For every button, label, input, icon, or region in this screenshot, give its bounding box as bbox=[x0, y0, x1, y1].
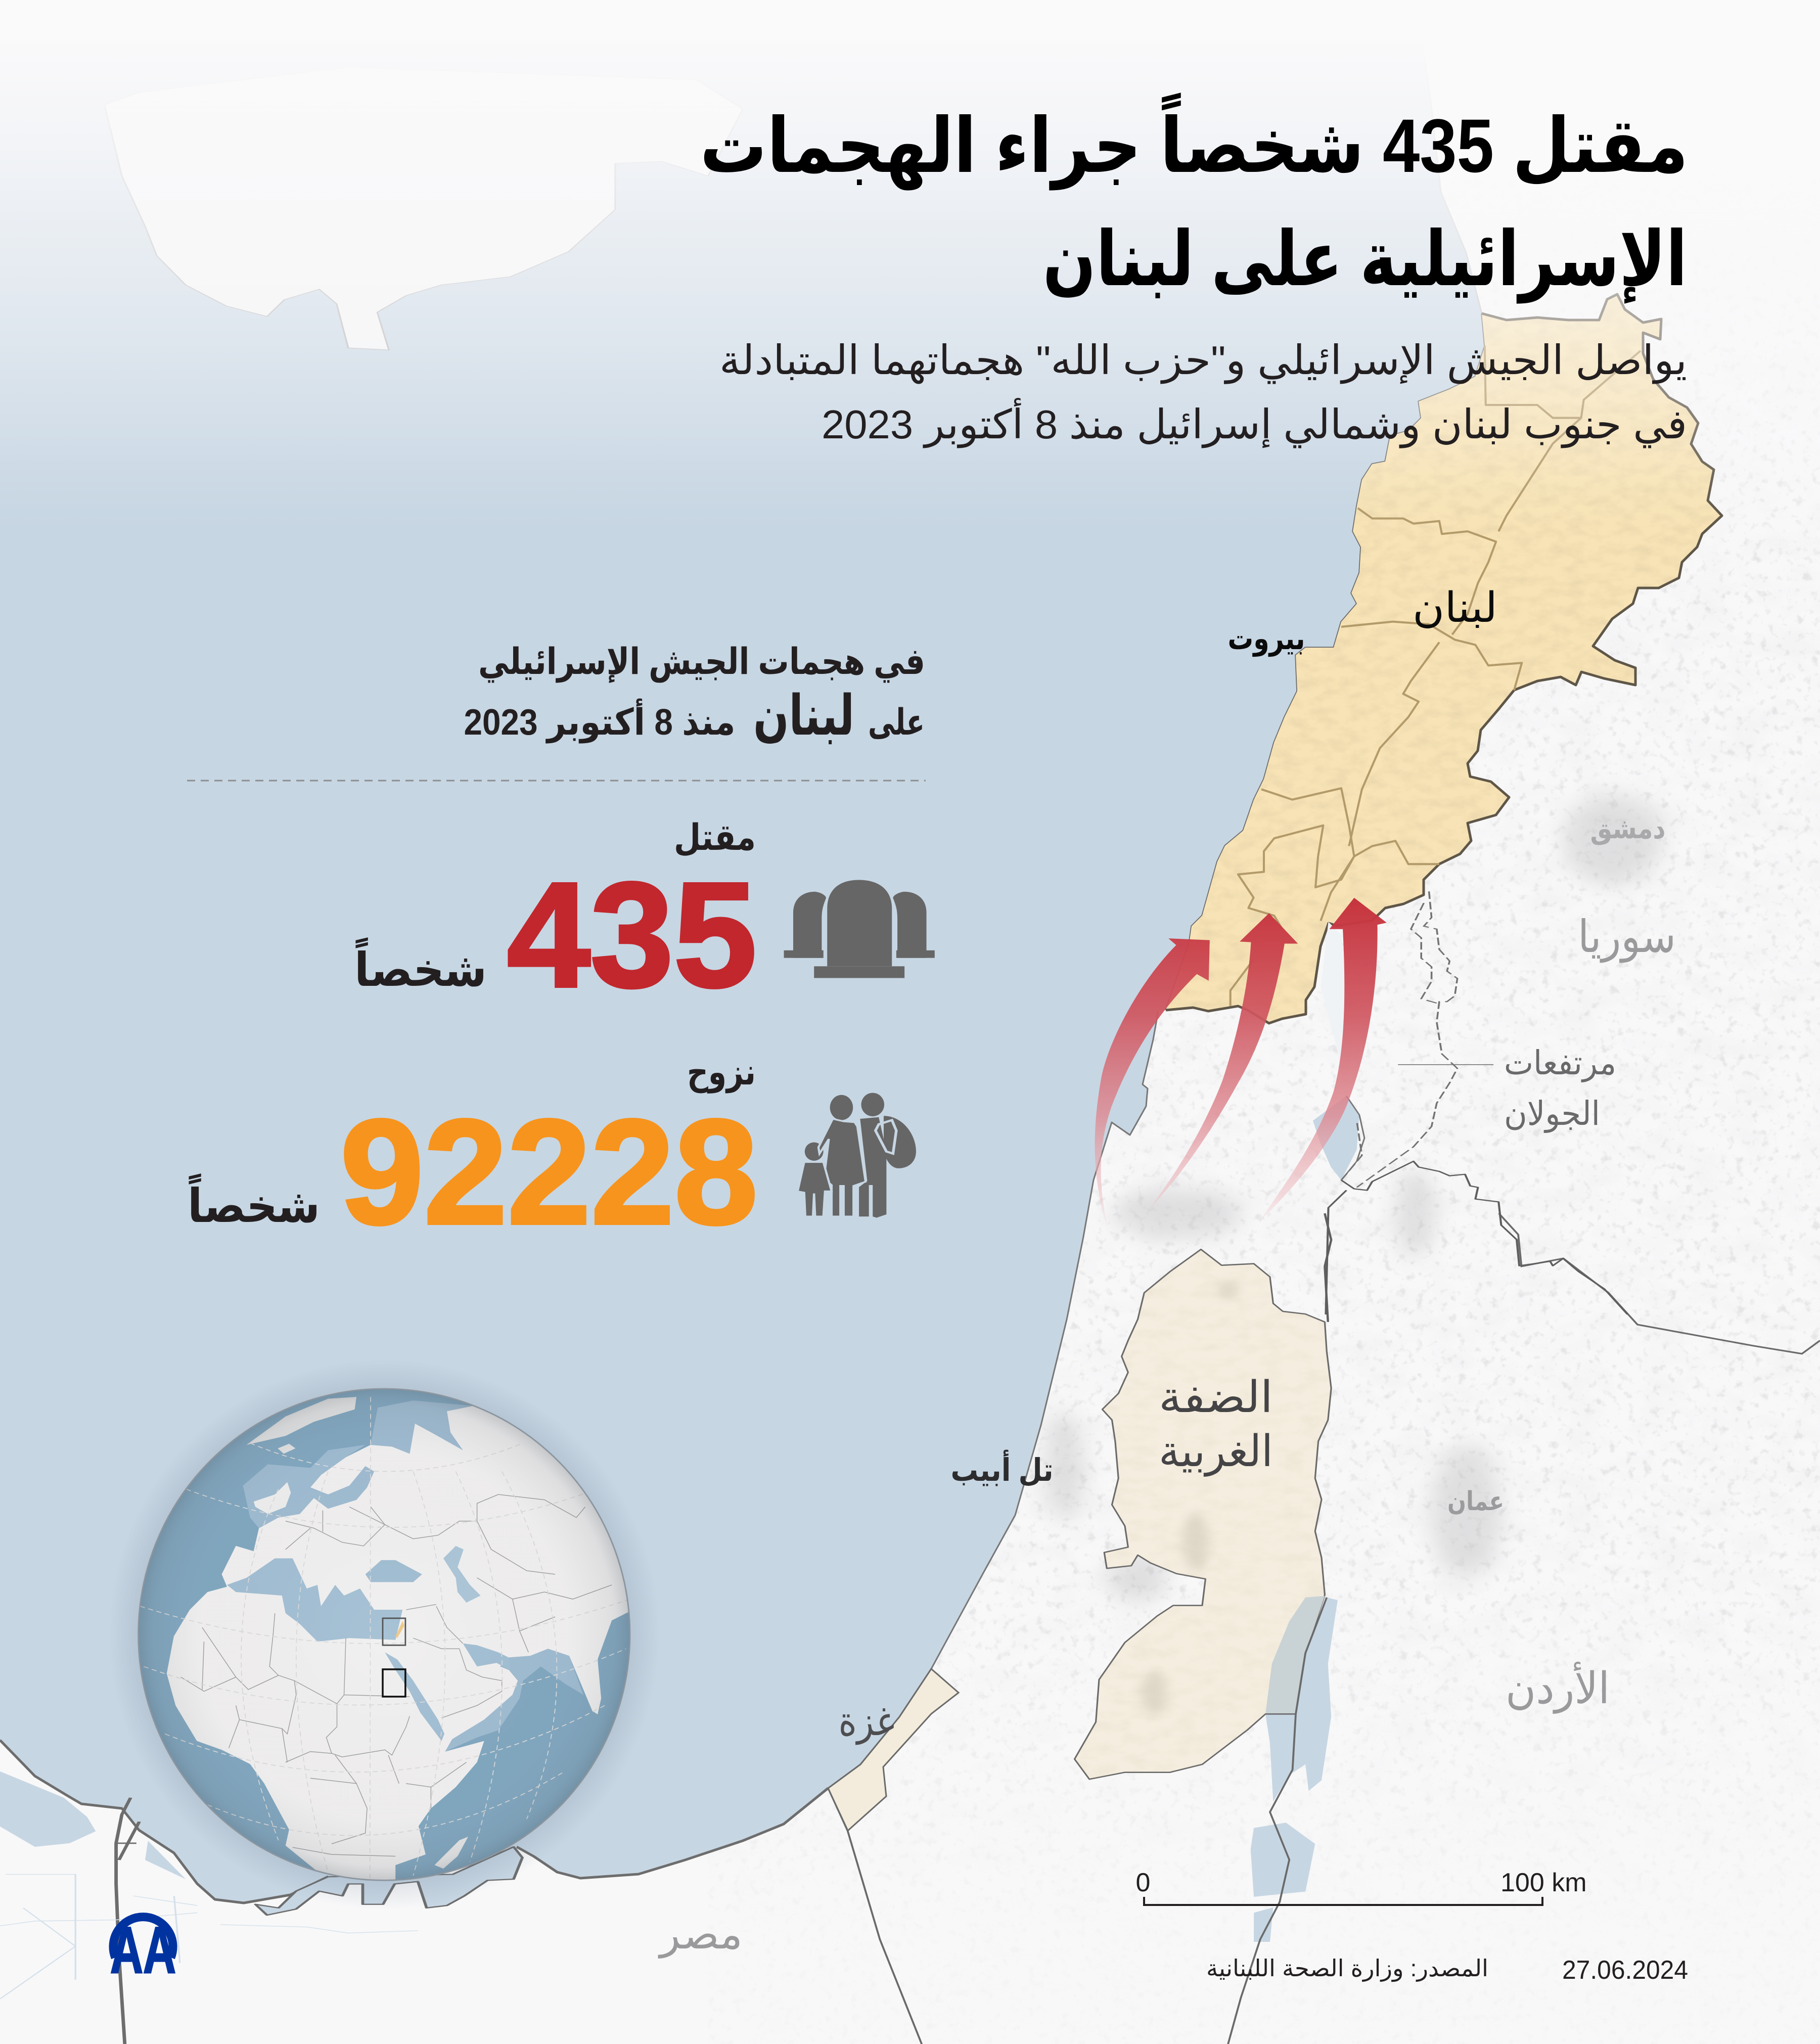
map labels: الغربية bbox=[1159, 1427, 1273, 1477]
subtitle bbox=[719, 338, 1687, 448]
number: 435: 435 bbox=[507, 851, 757, 1018]
map labels: الأردن bbox=[1506, 1662, 1610, 1714]
subtitle: يواصل الجيش الإسرائيلي و"حزب الله" هجماتهما المتبادلة bbox=[719, 338, 1687, 384]
map labels: بيروت bbox=[1227, 621, 1305, 657]
panel: statistics heading: منذ 8 أكتوبر 2023 bbox=[464, 698, 735, 744]
date: 27.06.2024 bbox=[1562, 1956, 1688, 1985]
Iceland bbox=[278, 1444, 295, 1453]
panel: statistics heading: في هجمات الجيش الإسرائيلي bbox=[478, 642, 925, 683]
globe shading bbox=[139, 1389, 630, 1880]
map labels: غزة bbox=[838, 1699, 895, 1745]
Persian Gulf bbox=[463, 1644, 511, 1670]
globe land base bbox=[139, 1389, 630, 1880]
subtitle: في جنوب لبنان وشمالي إسرائيل منذ 8 أكتوبر 2023 bbox=[822, 398, 1687, 448]
Caspian Sea bbox=[443, 1546, 481, 1603]
Jordan river border bbox=[1325, 1213, 1331, 1322]
map: Cyprus bbox=[105, 67, 743, 350]
West Bank terrain bbox=[1092, 1279, 1325, 1778]
map labels: تل أبيب bbox=[950, 1449, 1054, 1488]
globe rim bbox=[139, 1389, 630, 1880]
arrows bbox=[1095, 898, 1387, 1238]
icon: displaced family bbox=[798, 1093, 916, 1218]
map labels: سوريا bbox=[1578, 912, 1676, 963]
panel: statistics heading bbox=[464, 642, 925, 747]
Wadi Araba border bbox=[1228, 1598, 1327, 2044]
icon: AA logo: AA bbox=[110, 1913, 176, 1987]
Sea of Galilee bbox=[1313, 1096, 1359, 1180]
Jordan Saudi border bbox=[1499, 1213, 1820, 1354]
Arabian Sea shelf bbox=[445, 1649, 583, 1752]
panel: statistics heading: على bbox=[868, 702, 925, 743]
Golan leader line bbox=[1398, 1064, 1493, 1065]
label: killed: مقتل bbox=[674, 817, 756, 858]
Galilee east shore bbox=[1341, 1096, 1364, 1180]
Britain and Ireland bbox=[254, 1482, 291, 1514]
coastline bbox=[0, 0, 1485, 1903]
Lebanon outline bbox=[1166, 294, 1722, 1023]
Dead Sea section in West Bank bbox=[1265, 1596, 1325, 1714]
panel: killed statistic bbox=[354, 817, 935, 1018]
map labels: مرتفعات bbox=[1504, 1044, 1616, 1082]
icon: tombstones bbox=[784, 880, 935, 978]
map: Gaza bbox=[828, 1669, 959, 1831]
country borders bbox=[181, 1494, 612, 1856]
Hula valley bbox=[1321, 922, 1351, 1096]
map labels: عمان bbox=[1447, 1487, 1504, 1516]
Atlantic and Arctic oceans bbox=[101, 1365, 477, 1932]
arrow 3 bbox=[1259, 898, 1387, 1222]
scale bar bbox=[1136, 1868, 1587, 1905]
arrow 1 bbox=[1095, 938, 1210, 1238]
map labels: لبنان bbox=[1413, 585, 1497, 631]
Lebanon governorate borders bbox=[1231, 346, 1641, 1006]
map labels: الجولان bbox=[1504, 1095, 1600, 1133]
northern shelf seas bbox=[243, 1445, 374, 1528]
map: West Bank and Dead Sea bbox=[828, 1213, 1820, 2044]
sea bbox=[0, 0, 1485, 1903]
title bbox=[700, 93, 1689, 304]
Mediterranean Sea bbox=[227, 1558, 402, 1642]
Dead Sea bbox=[1265, 1598, 1338, 1801]
Jordan Syria border bbox=[1341, 1161, 1627, 1314]
Indian Ocean bbox=[395, 1610, 675, 1932]
label: displaced: نزوح bbox=[687, 1052, 756, 1094]
unit: persons: شخصاً bbox=[354, 937, 487, 996]
map labels: مصر bbox=[658, 1912, 743, 1959]
scale bar: 100 km bbox=[1500, 1868, 1587, 1897]
map: Lebanon bbox=[1153, 283, 1734, 1031]
urban areas bbox=[1044, 794, 1663, 1603]
map labels bbox=[658, 585, 1676, 1959]
map: Egypt lagoons and canals bbox=[0, 1772, 522, 2044]
locator box: Lebanon bbox=[383, 1618, 405, 1645]
globe glow bbox=[109, 1359, 660, 1910]
Red Sea bbox=[385, 1652, 444, 1741]
Golan dashed borders bbox=[1357, 891, 1458, 1188]
unit: persons: شخصاً bbox=[188, 1173, 320, 1232]
icon: AA logo bbox=[110, 1913, 176, 1987]
Black Sea bbox=[366, 1560, 422, 1582]
graticule bbox=[140, 1397, 629, 1879]
source: المصدر: وزارة الصحة اللبنانية bbox=[1206, 1955, 1488, 1982]
top fade overlay bbox=[0, 0, 1820, 531]
Greenland bbox=[247, 1397, 356, 1445]
panel: displaced statistic bbox=[188, 1052, 916, 1255]
map labels: دمشق bbox=[1590, 812, 1665, 845]
globe locator bbox=[101, 1365, 675, 1932]
West Bank bbox=[1075, 1249, 1331, 1779]
map labels: الضفة bbox=[1159, 1373, 1273, 1422]
scale bar: 0 bbox=[1136, 1868, 1150, 1897]
title: مقتل 435 شخصاً جراء الهجمات bbox=[700, 93, 1689, 191]
Madagascar bbox=[434, 1837, 468, 1869]
map: northern borders and Golan bbox=[1313, 891, 1627, 1314]
southern basins bbox=[1251, 1823, 1315, 1942]
locator box: lower bbox=[383, 1669, 405, 1697]
Arctic shelf bbox=[371, 1400, 474, 1453]
title: الإسرائيلية على لبنان bbox=[1042, 216, 1688, 304]
terrain and urban texture bbox=[802, 415, 1820, 1834]
number: 92228: 92228 bbox=[340, 1088, 758, 1255]
panel: statistics heading: لبنان bbox=[753, 685, 854, 747]
arrow 2 bbox=[1148, 913, 1298, 1211]
Gaza Egypt border bbox=[828, 1788, 922, 2044]
Lebanon fill bbox=[1153, 283, 1734, 1031]
